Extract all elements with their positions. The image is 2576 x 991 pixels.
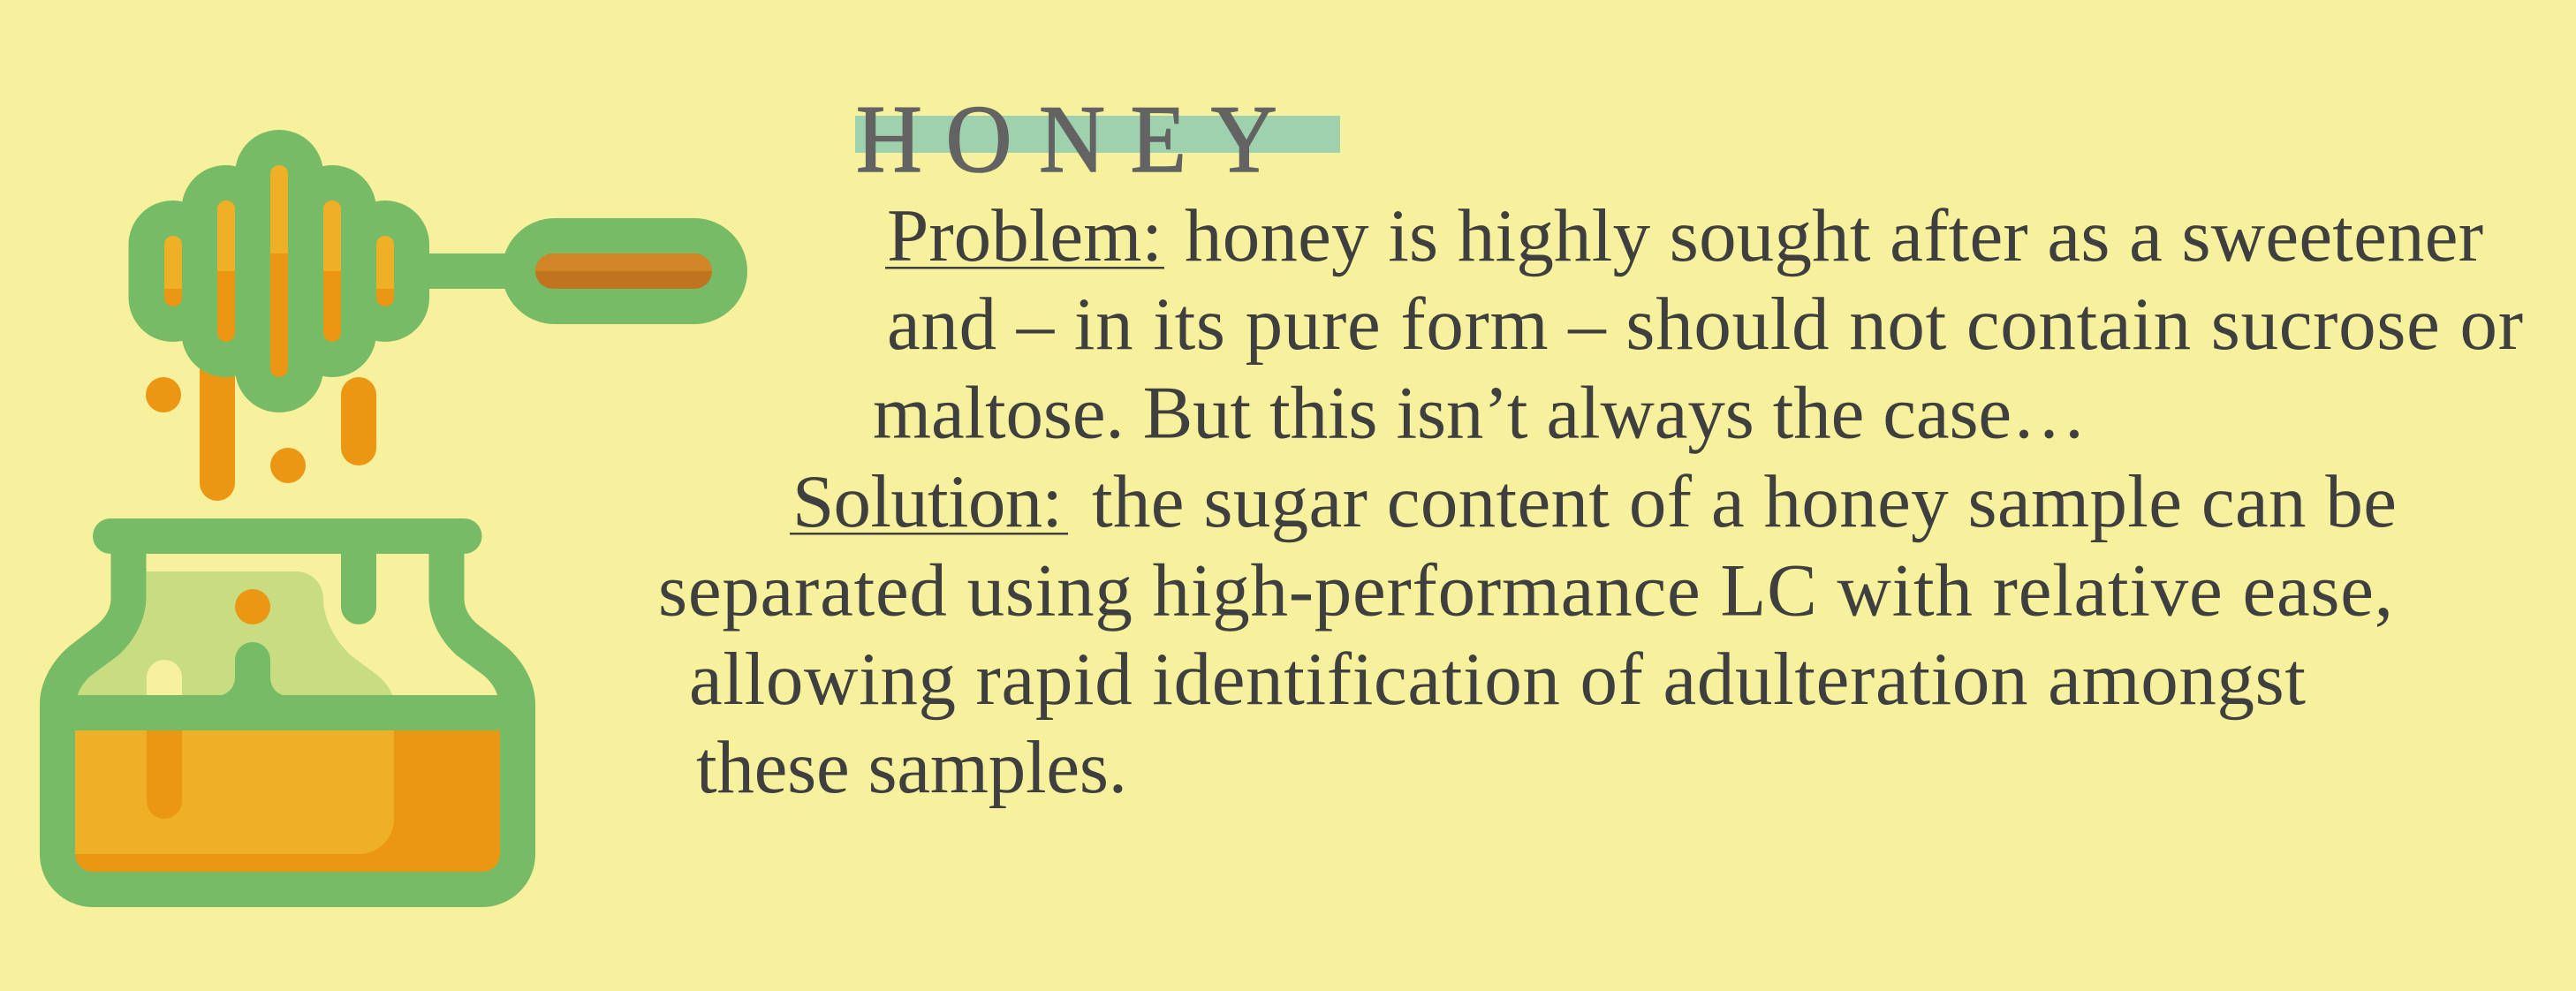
honey light layer — [75, 730, 394, 854]
heading highlight bar — [855, 116, 1340, 153]
solution text line 1: the sugar content of a honey sample can be — [1092, 460, 2397, 543]
drip rising from band — [217, 642, 286, 696]
icon: honey dipper with drips — [129, 130, 747, 501]
dipper head — [129, 130, 429, 412]
solution text line 3: allowing rapid identification of adulteration amongst — [689, 638, 2306, 721]
jar interior — [78, 554, 497, 695]
problem label: Problem: — [887, 194, 1163, 277]
heading: HONEY: HONEY — [856, 86, 1277, 193]
honey dark layer — [75, 730, 500, 872]
jar outline — [40, 539, 535, 907]
dipper slots with honey — [164, 165, 394, 377]
solution text line 4: these samples. — [696, 726, 1127, 809]
falling drop — [235, 589, 270, 624]
text block: problem and solution — [658, 194, 2523, 809]
problem text line 3: maltose. But this isn’t always the case… — [873, 371, 2087, 454]
jar band — [44, 695, 531, 730]
honey inner drip — [147, 730, 182, 819]
handle inlay — [535, 253, 712, 289]
problem text line 1: honey is highly sought after as a sweetener — [1185, 194, 2483, 277]
jar lid — [93, 518, 482, 554]
highlight cutout drip — [147, 660, 182, 695]
drip from lid — [341, 548, 376, 624]
dipper stem — [424, 253, 512, 289]
honey drips and drops — [146, 353, 376, 501]
glass highlight — [78, 571, 392, 695]
dipper handle — [502, 218, 747, 324]
icon: honey jar — [40, 518, 535, 907]
problem text line 2: and – in its pure form – should not contain sucrose or — [887, 283, 2523, 366]
solution label: Solution: — [792, 460, 1063, 543]
solution text line 2: separated using high-performance LC with relative ease, — [658, 549, 2393, 632]
